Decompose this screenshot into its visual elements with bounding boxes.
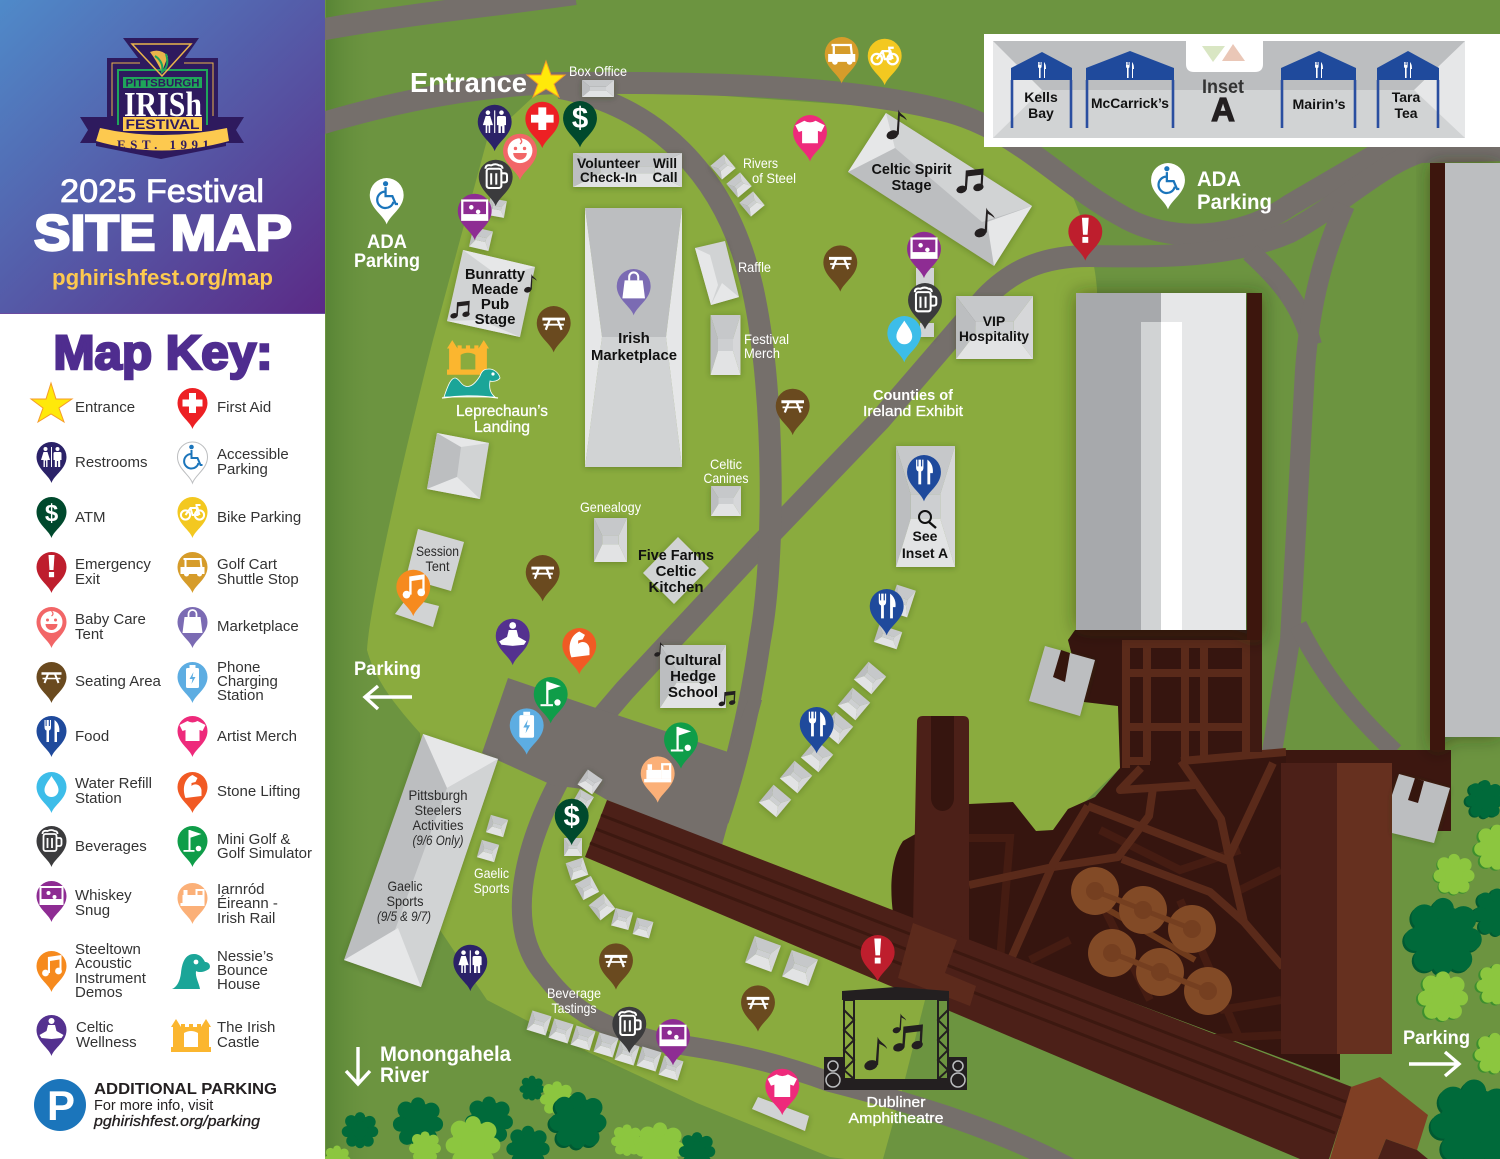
label: ADA parking east: Parking [1197,191,1272,214]
label: counties of ireland: Ireland Exhibit [863,403,964,420]
label: gaelic sports in tent: Gaelic [388,878,422,894]
legend: emergency exit: Exit [75,571,101,588]
beverage tasting tents [527,1011,683,1080]
label: session tent [416,543,459,574]
legend: marketplace: Marketplace [217,618,299,635]
label: rivers of steel: of Steel [752,170,796,186]
label: five farms celtic kitchen: Five Farms [638,547,714,564]
pin: ADA parking east [1151,163,1185,209]
additional parking callout: pghirishfest.org/parking [93,1114,260,1130]
festival lawn [367,89,1120,1159]
legend: accessible parking [178,442,289,483]
legend: seating area: Seating Area [75,673,162,690]
label: volunteer check-in [577,155,641,185]
tent: pittsburgh steelers and gaelic sports [344,734,498,987]
legend: steeltown acoustic instrument demos: Steeltown [75,941,141,958]
label: parking west: Parking [354,659,421,680]
inset orientation triangles [1202,44,1245,62]
label: irish marketplace: Irish [618,330,650,347]
pin: ATM south [555,799,589,845]
label: celtic canines: Canines [704,470,748,486]
food stall: Kells Bay: Bay [1028,105,1054,121]
label: counties of ireland: Counties of [873,387,954,404]
label: pittsburgh steelers activities: Pittsburgh [408,787,468,803]
food stall: Mairin's [1281,51,1356,128]
label: gaelic sports: Sports [474,880,510,896]
legend: steeltown acoustic instrument demos: Demos [75,984,123,1001]
legend: stone lifting [178,772,300,813]
legend: ATM: $ [45,500,59,527]
pin: bike parking [868,39,902,85]
map pins [370,37,1185,1115]
brown band [1286,750,1451,831]
legend: restrooms [36,442,148,483]
label: ADA parking west: ADA [367,232,407,253]
tent: session tent [406,529,464,591]
legend: irish castle: Castle [217,1034,260,1051]
logo: EST. 1991 [117,137,209,152]
label: leprechaun's landing: Leprechaun’s [456,403,548,420]
legend: phone charging station: Phone [217,659,260,676]
pin: artist merch north [793,115,827,161]
label: cultural hedge school [665,652,721,701]
label: pittsburgh steelers activities: (9/6 Only) [412,832,464,848]
arc of tents [564,769,653,938]
title: 2025 festival: 2025 Festival [60,173,264,209]
label: ADA parking east: ADA [1197,168,1241,191]
pin: ATM entrance [563,101,597,147]
label: see inset A: See [913,528,938,544]
label: bunratty stage [465,266,526,328]
tent: festival merch [710,315,740,375]
legend: accessible parking: Parking [217,461,268,478]
pin: seating east [823,245,857,292]
U-shaped building right [1392,774,1450,843]
legend: emergency exit [36,552,151,593]
legend: bike parking: Bike Parking [217,509,301,526]
legend: first aid [178,388,271,429]
tent: rivers of steel [710,154,765,217]
label: irish marketplace [591,330,677,364]
vertical brown block [1281,763,1392,1054]
label: session tent: Session [416,543,459,559]
label: volunteer check-in: Check-In [580,169,637,185]
beam web [969,752,1286,967]
logo [80,38,244,159]
legend: water refill station [36,772,152,813]
food tents row [759,585,916,817]
arrow: parking east [1409,1052,1459,1076]
legend: beverages [36,826,147,867]
legend: whiskey snug: Snug [75,902,110,919]
pin: stone lifting [562,628,596,674]
icon: bouncy castle and nessie [442,340,500,398]
label: leprechaun's landing: Landing [474,419,530,436]
pin: mini golf west [534,677,568,723]
food stall: Tara Tea [1377,51,1439,128]
label: bunratty stage: Pub [481,296,509,313]
label: rivers of steel [743,155,796,186]
pin: beverages entrance [479,160,513,206]
label: gaelic sports [474,865,510,896]
right dark strip and gray building [1430,163,1500,750]
legend: whiskey snug [36,881,132,922]
two tents near amphitheatre [745,936,818,986]
label: cultural hedge school: Hedge [670,668,716,685]
pin: beverages east [908,283,942,329]
arrow: river [346,1047,370,1084]
legend: ATM: ATM [75,509,106,526]
pin: celtic wellness [496,619,530,665]
label: gaelic sports: Gaelic [474,865,509,881]
label: pittsburgh steelers activities: Steelers [414,802,462,818]
legend: phone charging station: Station [217,687,264,704]
label: box office: Box Office [569,63,627,79]
tent: genealogy [594,518,627,562]
label: vip hospitality: VIP [983,313,1005,329]
inset label [1202,77,1245,128]
pin: water refill [887,316,921,362]
pin: restrooms south [453,945,487,991]
label: will call: Will [653,155,677,171]
pin: marketplace [617,269,651,315]
label: monongahela river [380,1043,511,1087]
pin: whiskey snug south [656,1019,690,1065]
legend: celtic wellness: Wellness [76,1034,137,1051]
pin: ATM entrance: $ [572,102,588,135]
label: rivers of steel: Rivers [743,155,778,171]
panel: map key [0,314,325,1159]
label: gaelic sports in tent [377,878,431,924]
pin: artist merch south [765,1069,799,1115]
label: parking east: Parking [1403,1028,1470,1049]
merch strip tent [752,1097,809,1131]
map labels [346,63,1470,1127]
pin: seating [537,306,571,352]
label: bunratty stage: Meade [472,281,518,298]
gaelic sports small tents [477,815,508,862]
inset A panel [984,34,1500,147]
legend: whiskey snug: Whiskey [75,887,132,904]
legend: nessie's bounce house [172,948,273,993]
label: monongahela river: Monongahela [380,1043,511,1066]
rail bridge [585,800,1352,1159]
legend: ATM [36,497,106,538]
legend: nessie's bounce house: Nessie’s [217,948,273,965]
label: see inset A: Inset A [902,545,948,561]
legend: food [36,716,109,757]
pin: emergency exit north [1068,214,1102,261]
label: irish marketplace: Marketplace [591,347,677,364]
label: festival merch [744,331,789,361]
map background [325,0,1500,1159]
tent: five farms celtic kitchen [643,537,709,604]
legend: irish rail: Éireann - [217,895,278,912]
label: five farms celtic kitchen: Kitchen [648,579,704,596]
legend: nessie's bounce house: House [217,976,260,993]
label: dubliner amphitheatre [848,1094,944,1127]
legend: irish rail [178,881,278,927]
label: celtic spirit stage [872,161,952,194]
label: genealogy: Genealogy [580,499,641,515]
pin: emergency exit south [861,935,895,981]
tent: celtic canines [711,486,741,516]
label: counties of ireland [863,387,964,420]
legend: stone lifting: Stone Lifting [217,783,300,800]
label: leprechaun's landing [456,403,548,436]
pin: whiskey snug east [907,232,941,278]
legend: golf cart shuttle stop [178,552,299,593]
tent: irish marketplace [585,208,682,467]
label: ADA parking west [354,232,420,272]
roads [320,0,1500,1159]
legend: mini golf and golf simulator: Golf Simulator [217,845,312,862]
title: site map: SITE MAP [34,205,292,261]
additional parking callout [34,1079,277,1131]
label: beverage tastings: Tastings [552,1000,596,1016]
tent: raffle [695,241,739,305]
legend: beverages: Beverages [75,838,147,855]
label: will call [652,155,678,185]
pin: seating southeast [741,985,775,1032]
pin: whiskey snug entrance [458,194,492,240]
label: pittsburgh steelers activities: Activities [412,817,464,833]
label: raffle: Raffle [738,259,771,275]
tent: cultural hedge school [660,645,726,708]
additional parking callout: P [47,1082,75,1129]
tent: box office [582,80,614,97]
dubliner amphitheatre stage [824,987,967,1090]
label: cultural hedge school: School [668,684,718,701]
label: beverage tastings [547,985,601,1016]
label: dubliner amphitheatre: Amphitheatre [848,1110,944,1127]
legend: first aid: First Aid [217,399,271,416]
legend: artist merch [178,716,297,757]
main gray building [1076,293,1262,640]
label: vip hospitality: Hospitality [959,328,1029,344]
grid building [1124,640,1246,768]
pin: seating center [776,389,810,435]
legend: golf cart shuttle stop: Golf Cart [217,556,278,573]
label: entrance: Entrance [410,67,527,98]
bridge crossing block [898,923,976,1006]
turbine wheels [1071,867,1232,1015]
legend: seating area [36,662,162,703]
label: celtic canines [704,456,748,486]
label: ADA parking west: Parking [354,251,420,272]
legend: restrooms: Restrooms [75,454,148,471]
food stall: Tara Tea: Tara [1392,89,1420,105]
label: vip hospitality [959,313,1029,344]
pin: food inset [907,455,941,501]
bridge end block [1330,1077,1428,1159]
label: monongahela river: River [380,1064,429,1087]
inset label: A [1211,91,1235,128]
label: pittsburgh steelers activities [408,787,468,848]
pin: irish rail [641,756,675,803]
legend: artist merch: Artist Merch [217,728,297,745]
food stall: McCarrick's [1086,51,1174,128]
tent: under steeltown pin [395,598,439,627]
chimney [913,716,969,945]
label: five farms celtic kitchen: Celtic [656,563,696,580]
label: celtic spirit stage: Celtic Spirit [872,161,952,178]
pin: food row south [800,707,834,753]
label: celtic spirit stage: Stage [892,177,932,194]
additional parking callout: For more info, visit [94,1098,213,1114]
legend: irish castle [171,1019,275,1052]
legend: phone charging station [178,659,278,704]
pin: golf cart [825,37,859,83]
pin: ADA parking west [370,178,404,224]
food stall: Kells Bay [1011,52,1072,128]
festival tents [344,80,1033,1131]
secondary beams [969,830,1281,1040]
legend: mini golf and golf simulator [178,826,312,867]
label: festival merch: Festival [744,331,789,347]
industrial ruins [585,630,1451,1159]
trees lower right and lower left [323,780,1500,1159]
pin: mini golf east [664,722,698,769]
pin: seating west [526,555,560,601]
sidebar header [0,0,325,314]
legend: irish castle: The Irish [217,1019,275,1036]
icon: entrance star [527,61,565,97]
legend: baby care tent [36,607,146,648]
inset label: Inset [1202,77,1245,98]
legend: baby care tent: Tent [75,626,104,643]
tent: inset A marker [896,446,955,567]
label: bunratty stage: Stage [475,311,515,328]
label: volunteer check-in: Volunteer [577,155,641,171]
legend: bike parking [178,497,301,538]
logo: IRISh [124,85,202,124]
pin: baby care tent [503,134,537,180]
arrow: parking west [365,686,412,709]
legend: marketplace [178,607,299,648]
food stall: Tara Tea: Tea [1394,105,1418,121]
legend: baby care tent: Baby Care [75,611,146,628]
label: dubliner amphitheatre: Dubliner [866,1094,926,1111]
tent: celtic spirit stage [848,113,1032,266]
legend: emergency exit: Emergency [75,556,151,573]
label: celtic canines: Celtic [710,456,742,472]
label: festival merch: Merch [744,345,780,361]
legend: steeltown acoustic instrument demos: Acoustic [75,955,132,972]
legend: water refill station: Station [75,790,122,807]
dark ground mass [891,630,1392,1080]
legend: celtic wellness [36,1015,137,1056]
label: gaelic sports in tent: Sports [386,893,424,909]
label: ADA parking east [1197,168,1272,214]
legend: irish rail: Iarnród [217,881,265,898]
pin: food row north [870,589,904,635]
legend: irish rail: Irish Rail [217,910,275,927]
small tents near whiskey snug [469,198,507,251]
legend: mini golf and golf simulator: Mini Golf & [217,831,290,848]
food stall: Kells Bay: Kells [1024,89,1058,105]
tent: volunteer check-in and will call [573,153,682,187]
tent: bunratty meade pub stage [447,250,535,337]
legend: food: Food [75,728,109,745]
pin: ATM south: $ [564,800,580,833]
pin: phone charging [510,708,544,755]
food stall: McCarrick's: McCarrick’s [1091,95,1169,111]
legend: entrance [31,383,135,422]
food stall: Mairin's: Mairin’s [1292,96,1346,112]
label: five farms celtic kitchen [638,547,714,596]
legend: steeltown acoustic instrument demos [36,941,147,1001]
tent: vip hospitality [956,296,1033,359]
legend: nessie's bounce house: Bounce [217,962,268,979]
label: cultural hedge school: Cultural [665,652,721,669]
label: gaelic sports in tent: (9/5 & 9/7) [377,908,431,924]
pin: steeltown acoustic [396,570,430,616]
legend: phone charging station: Charging [217,673,278,690]
logo: PITTSBURGH [126,78,200,90]
plaza [482,678,762,845]
pin: restrooms at entrance [478,105,512,151]
small tents by whiskey and beverages pins [916,268,934,337]
music notes on stages [450,110,995,707]
legend: accessible parking: Accessible [217,446,289,463]
heading: map key: Map Key: [54,327,272,380]
legend: entrance: Entrance [75,399,135,416]
pin: seating south [599,943,633,990]
label: see inset A [902,511,948,561]
additional parking callout: ADDITIONAL PARKING [94,1081,277,1098]
logo: FESTIVAL [126,116,200,132]
pin: beverages south [612,1007,646,1053]
label: will call: Call [652,169,678,185]
label: beverage tastings: Beverage [547,985,601,1001]
label: bunratty stage: Bunratty [465,266,526,283]
tent: large unnamed [427,433,489,499]
label: session tent: Tent [426,558,450,574]
pin: first aid [525,102,559,148]
U-shaped building left [1029,646,1095,716]
url: pghirishfest.org/map [52,265,273,290]
legend: golf cart shuttle stop: Shuttle Stop [217,571,299,588]
legend: celtic wellness: Celtic [76,1019,114,1036]
legend: water refill station: Water Refill [75,775,152,792]
legend: steeltown acoustic instrument demos: Instrument [75,970,147,987]
